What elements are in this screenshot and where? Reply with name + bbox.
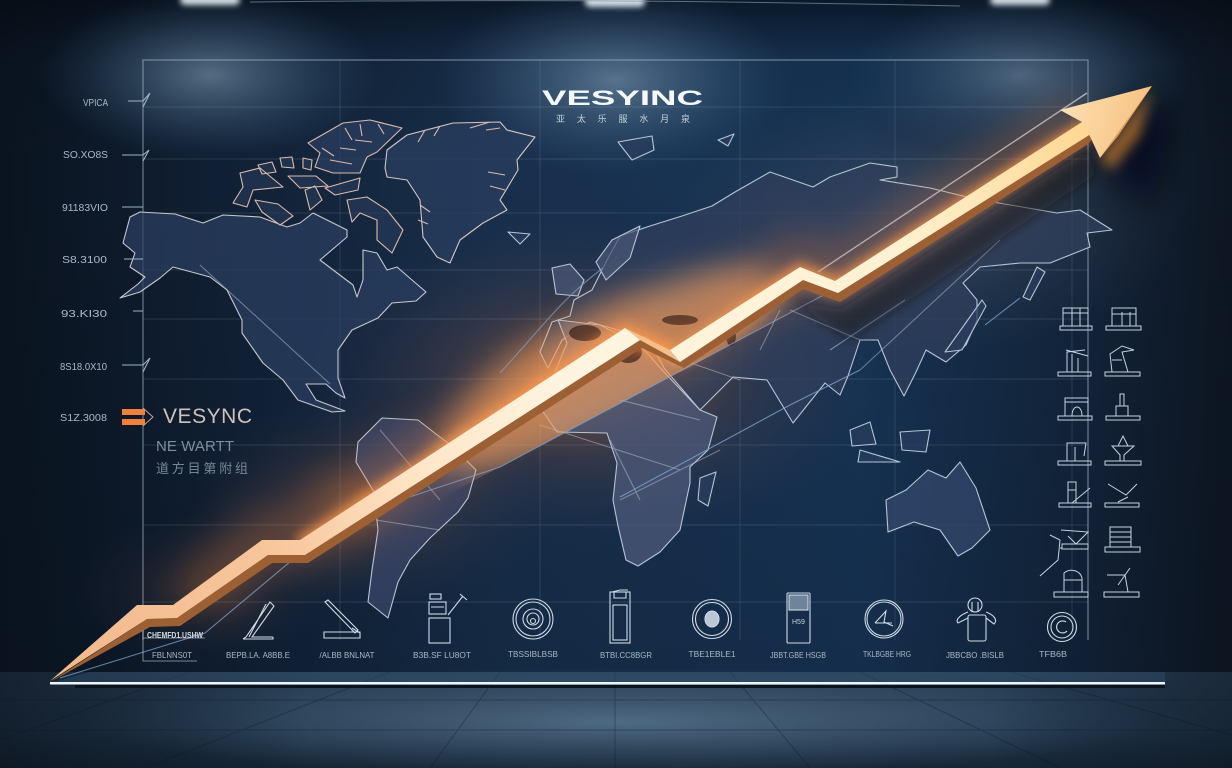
title subtext: 亚 太 乐 服 水 月 泉 [556, 113, 690, 124]
left axis labels: SO.XO8S [63, 149, 108, 161]
callout subheading: NE WARTT [156, 438, 234, 455]
title: VESYINC [542, 87, 703, 110]
map: country borders [200, 240, 1000, 530]
left axis labels [60, 97, 108, 424]
bottom icon captions: TBE1EBLE1 [688, 649, 736, 659]
bottom icon captions: JBBCBO .BISLB [946, 650, 1004, 660]
left axis labels: S8.3100 [62, 254, 107, 266]
title [542, 87, 703, 124]
map: uk and scandinavia [552, 226, 640, 296]
bottom icon captions [147, 630, 1067, 660]
arrow shaft lower section [50, 328, 640, 681]
map: australia [886, 462, 990, 556]
bottom icon captions: BEPB.LA. A8BB.E [226, 650, 290, 660]
map: small islands [508, 134, 1045, 506]
map: eurasia [540, 163, 1112, 423]
faint network lines [60, 93, 1087, 678]
map: north america [120, 212, 426, 412]
icon column left [1040, 308, 1092, 597]
icon: target [1048, 612, 1076, 642]
orange marker [122, 408, 153, 426]
icon: label bracket [143, 630, 205, 661]
icon column right [1104, 308, 1141, 597]
left axis labels: 8S18.0X10 [60, 361, 107, 373]
icon: phone device [787, 593, 810, 643]
icon: bottle and tool [429, 594, 467, 643]
bottom icon row [143, 590, 1076, 661]
arrow connecting section [625, 328, 680, 362]
arrow head [1060, 86, 1152, 158]
light band under arrow [422, 246, 798, 490]
bottom icon captions: TBSSIBLBSB [508, 649, 558, 659]
bottom icon captions: TFB6B [1039, 649, 1067, 659]
callout heading: VESYNC [163, 405, 252, 428]
ledge [50, 672, 1165, 688]
bottom icon captions: B3B.SF LU8OT [413, 650, 471, 660]
callout small text: 道方目第附组 [156, 461, 248, 476]
map: south america [356, 418, 476, 618]
bottom icon captions: JBBT.GBE HSGB [770, 650, 826, 660]
map: arctic islands [233, 157, 403, 253]
callout: vesync network [122, 405, 252, 476]
map: ellesmere island [308, 120, 402, 173]
bottom icon captions: /ALBB BNLNAT [320, 650, 374, 660]
left axis labels: VPICA [83, 97, 108, 109]
bottom icon captions: CHEMFD1.USHW [147, 630, 204, 640]
left axis labels: S1Z.3008 [60, 412, 107, 424]
map: arctic coast hatching [322, 122, 505, 224]
icon: tall device [610, 590, 630, 643]
icon: angle stand [243, 602, 274, 639]
axis tick marks [122, 93, 150, 372]
left axis labels: 91183VIO [62, 202, 108, 214]
bottom icon captions: FBLNNS0T [152, 650, 192, 660]
world map [120, 120, 1112, 618]
arrow shaft upper section [670, 122, 1102, 362]
map: africa [537, 320, 717, 566]
icon: round dial [513, 599, 553, 639]
icon: figure with arms [957, 598, 996, 641]
growth arrow [50, 86, 1170, 682]
bottom icon captions: TKLBGBE HRG [863, 649, 911, 659]
arrow lower bevel [50, 127, 1102, 682]
right icon columns [1040, 308, 1141, 597]
floor [0, 667, 1232, 768]
map: greenland [385, 122, 535, 263]
chart frame and grid [143, 60, 1088, 640]
icon: ring emblem [692, 600, 732, 638]
left axis labels: 93.KI30 [61, 308, 107, 320]
icon: ring with tool [865, 600, 903, 638]
mediterranean dark seas [569, 315, 736, 363]
bottom icon captions: BTBI.CC8BGR [600, 650, 652, 660]
icon: phone device: H59 [792, 619, 805, 626]
icon: hinged arm [324, 600, 360, 638]
